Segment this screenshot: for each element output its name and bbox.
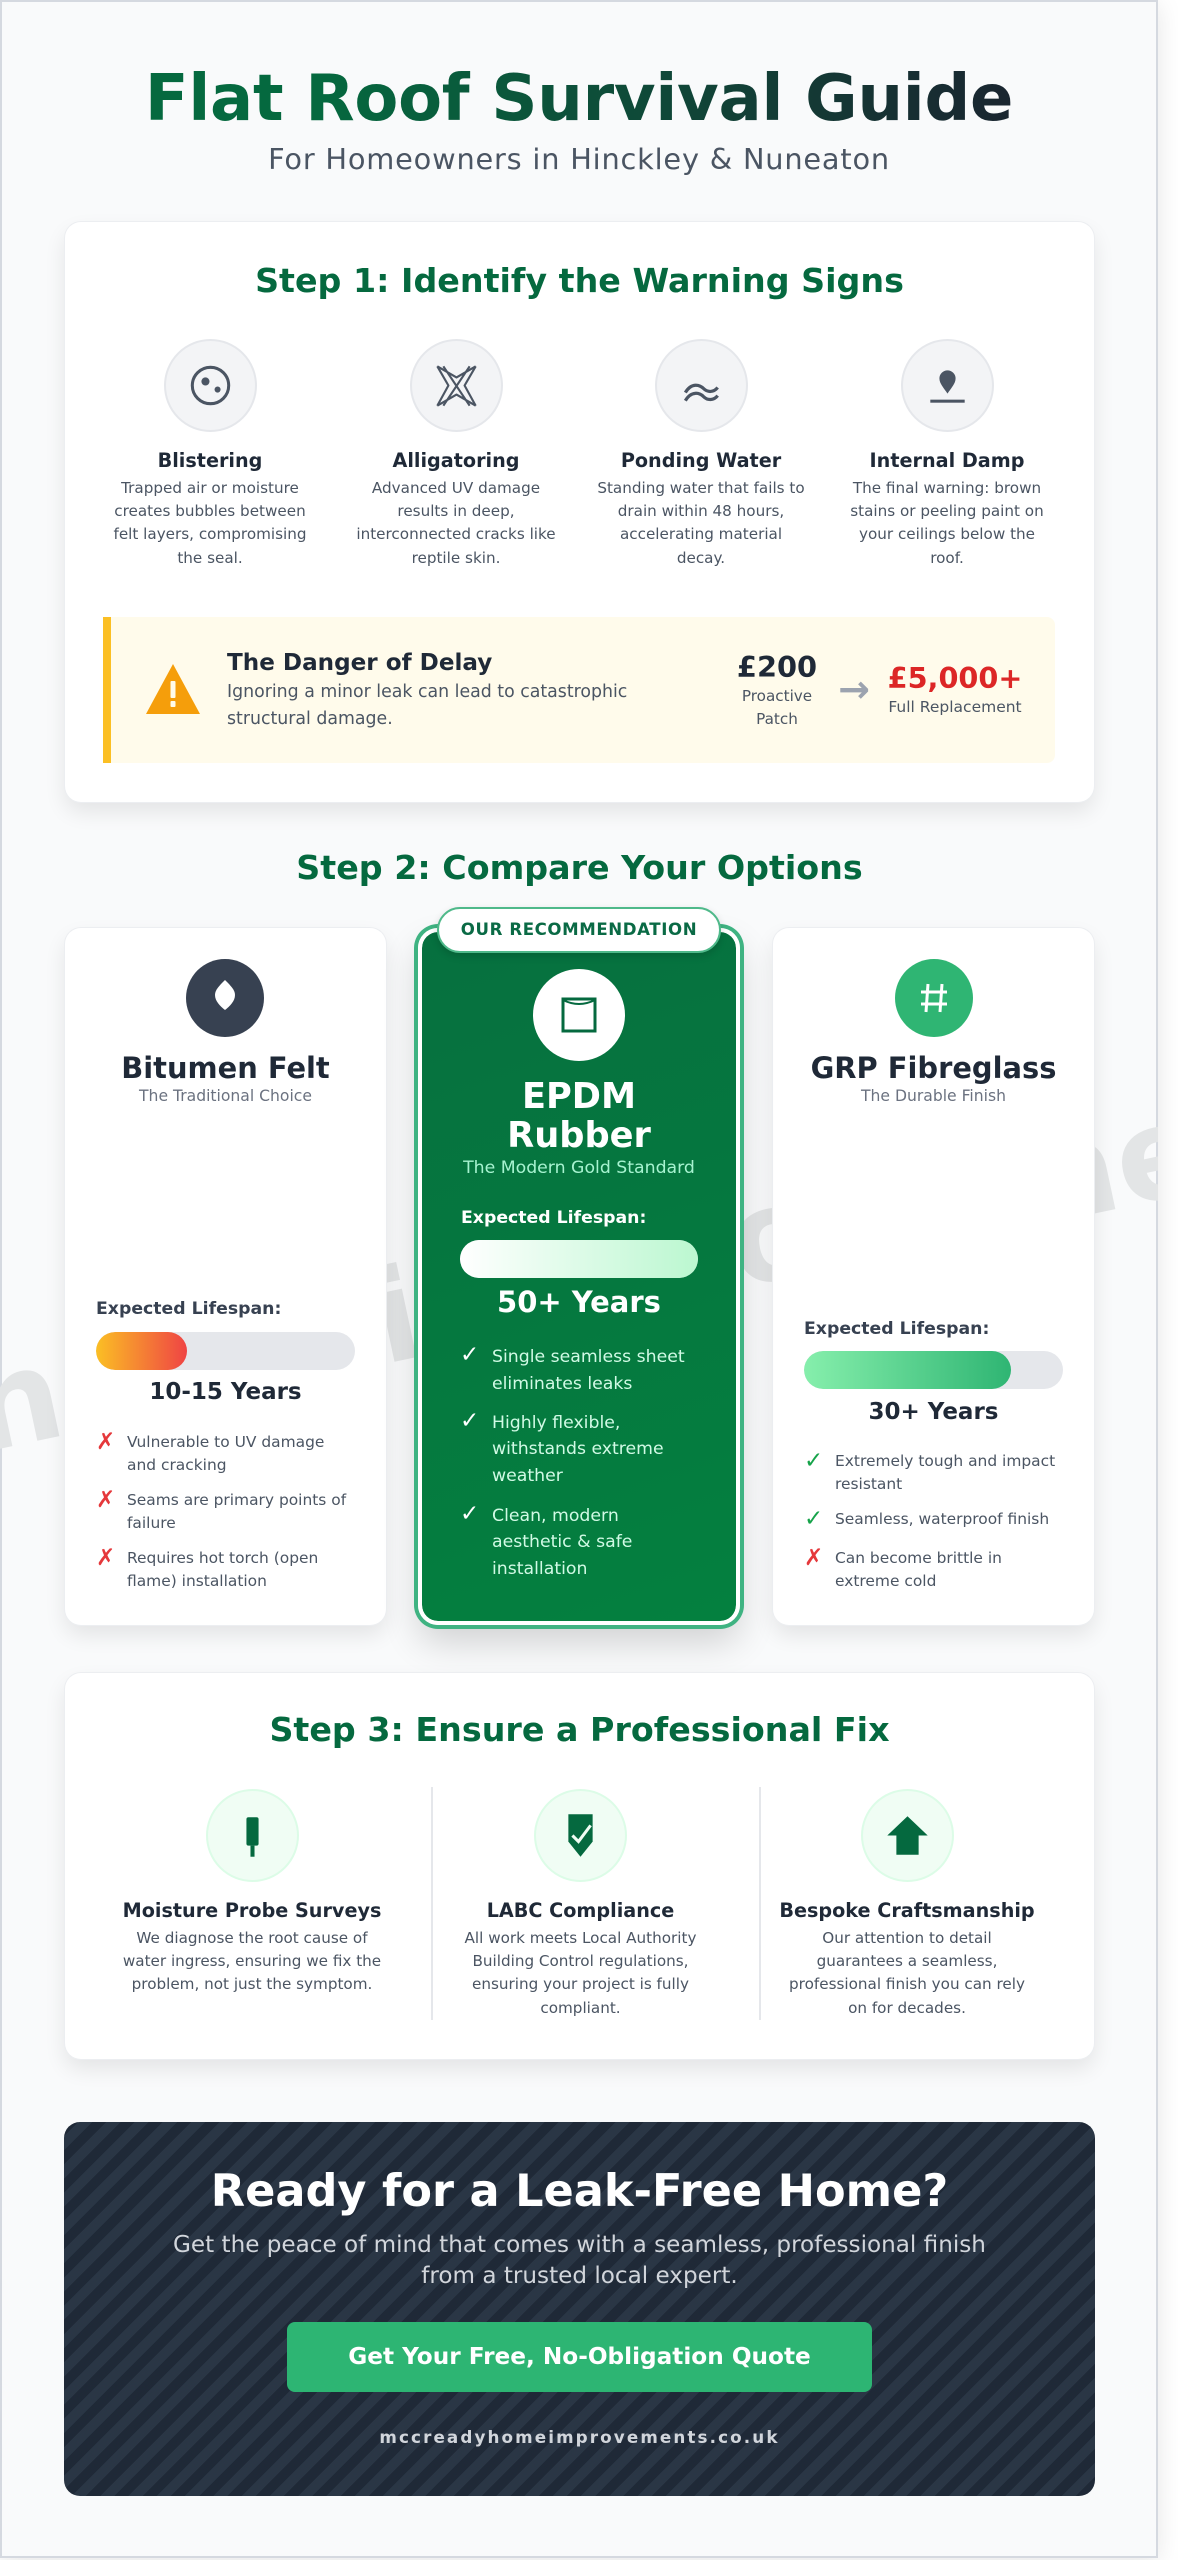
callout heading: The Danger of Delay: [227, 650, 492, 676]
point: flame) installation: [127, 1572, 267, 1590]
point: [804, 1448, 1055, 1493]
description: Trapped air or moisture: [121, 479, 299, 497]
label: Expected Lifespan:: [96, 1299, 281, 1319]
name: Blistering: [158, 449, 262, 472]
point: Can become brittle in: [835, 1548, 1002, 1566]
service: LABC compliance: [464, 1789, 696, 2017]
tagline: The Modern Gold Standard: [463, 1158, 695, 1178]
point: withstands extreme: [492, 1439, 664, 1459]
CTA text: from a trusted local expert.: [421, 2262, 738, 2288]
callout text: Ignoring a minor leak can lead to catastrophic: [227, 682, 627, 702]
name: Moisture Probe Surveys: [123, 1899, 381, 1922]
description: your ceilings below the: [859, 525, 1035, 543]
description: ensuring your project is fully: [472, 1975, 689, 1993]
cost: patch label: Proactive: [742, 686, 812, 704]
name: Bespoke Craftsmanship: [779, 1899, 1035, 1922]
description: guarantees a seamless,: [817, 1952, 997, 1970]
divider right: [759, 1787, 761, 2020]
point: aesthetic & safe: [492, 1532, 632, 1552]
button: Get Your Free, No-Obligation Quote: [348, 2343, 811, 2370]
description: creates bubbles between: [114, 502, 306, 520]
description: interconnected cracks like: [356, 525, 556, 543]
panel: step 3 professional fix: [65, 1673, 1094, 2059]
cost: replacement price: £5,000+: [888, 661, 1022, 695]
description: [123, 1929, 381, 1993]
point: [804, 1506, 1049, 1532]
icon: warning triangle: [146, 664, 200, 714]
description: felt layers, compromising: [113, 525, 307, 543]
panel: call to action: [64, 2122, 1095, 2496]
description: stains or peeling paint on: [850, 502, 1044, 520]
description: results in deep,: [397, 502, 515, 520]
point: ✗: [804, 1544, 823, 1570]
callout text: structural damage.: [227, 708, 393, 728]
lifespan bar: [460, 1240, 698, 1278]
lifespan value: 50+ Years: [497, 1285, 661, 1319]
point: ✓: [460, 1501, 479, 1527]
description: We diagnose the root cause of: [136, 1929, 368, 1947]
point: weather: [492, 1466, 563, 1486]
description: Building Control regulations,: [472, 1952, 689, 1970]
point: [460, 1408, 664, 1486]
service: bespoke craftsmanship: [779, 1789, 1035, 2017]
service: moisture probe: [123, 1789, 381, 1993]
label: Expected Lifespan:: [461, 1208, 646, 1228]
description: [464, 1929, 696, 2017]
tagline: The Traditional Choice: [139, 1087, 312, 1105]
cost: replacement label: Full Replacement: [888, 698, 1022, 716]
CTA text: [173, 2232, 986, 2288]
badge: [437, 907, 721, 953]
description: [789, 1929, 1025, 2017]
cost: patch label: Patch: [756, 710, 798, 728]
name: Ponding Water: [621, 449, 781, 472]
icon: cracks: [410, 339, 503, 432]
point: resistant: [835, 1475, 902, 1493]
divider left: [431, 1787, 433, 2020]
sign: ponding water: [597, 339, 805, 567]
badge: OUR RECOMMENDATION: [461, 920, 697, 939]
name: Alligatoring: [392, 449, 520, 472]
lifespan value: 30+ Years: [868, 1399, 998, 1425]
description: reptile skin.: [412, 549, 500, 567]
panel: EPDM rubber recommended: [418, 928, 740, 1625]
name: Rubber: [507, 1115, 651, 1156]
name: GRP Fibreglass: [811, 1050, 1056, 1084]
description: professional finish you can rely: [789, 1975, 1025, 1993]
point: Highly flexible,: [492, 1413, 620, 1433]
description: All work meets Local Authority: [465, 1929, 696, 1947]
watermark: i: [359, 1239, 433, 1394]
name: Bitumen Felt: [121, 1050, 330, 1084]
icon: drip: [901, 339, 994, 432]
description: on for decades.: [848, 1999, 966, 2017]
point: Extremely tough and impact: [835, 1452, 1055, 1470]
point: Single seamless sheet: [492, 1347, 685, 1367]
description: roof.: [930, 549, 964, 567]
description: accelerating material: [620, 525, 782, 543]
point: Requires hot torch (open: [127, 1548, 318, 1566]
point: failure: [127, 1514, 176, 1532]
point: eliminates leaks: [492, 1374, 632, 1394]
icon: blister: [164, 339, 257, 432]
subtitle: For Homeowners in Hinckley & Nuneaton: [268, 142, 890, 176]
heading: step 3: Step 3: Ensure a Professional Fix: [269, 1710, 890, 1749]
description: [113, 479, 307, 567]
description: Our attention to detail: [822, 1929, 992, 1947]
point: Vulnerable to UV damage: [127, 1432, 324, 1450]
description: Standing water that fails to: [597, 479, 805, 497]
point: [460, 1342, 685, 1394]
lifespan bar: [96, 1332, 355, 1370]
point: Seamless, waterproof finish: [835, 1510, 1049, 1528]
description: [356, 479, 556, 567]
name: Internal Damp: [870, 449, 1024, 472]
panel: step 1 warning signs: [65, 222, 1094, 802]
point: [96, 1544, 318, 1590]
watermark: o: [714, 1154, 831, 1318]
panel: GRP fibreglass: [773, 928, 1094, 1625]
lifespan bar: [804, 1351, 1063, 1389]
name: EPDM: [522, 1076, 636, 1116]
description: decay.: [677, 549, 725, 567]
point: installation: [492, 1559, 587, 1579]
description: The final warning: brown: [853, 479, 1041, 497]
heading: step 1: Step 1: Identify the Warning Signs: [255, 261, 904, 300]
description: Advanced UV damage: [372, 479, 540, 497]
point: ✗: [96, 1544, 115, 1570]
CTA text: Get the peace of mind that comes with a seamless, professional finish: [173, 2232, 986, 2258]
name: [507, 1076, 651, 1156]
point: and cracking: [127, 1456, 227, 1474]
callout text: [227, 682, 627, 728]
point: ✓: [804, 1448, 823, 1474]
point: ✓: [804, 1506, 823, 1532]
description: [597, 479, 805, 567]
tagline: The Durable Finish: [861, 1087, 1006, 1105]
icon: waves: [655, 339, 748, 432]
description: the seal.: [177, 549, 243, 567]
name: LABC Compliance: [487, 1899, 674, 1922]
callout: danger of delay: [103, 617, 1055, 763]
description: drain within 48 hours,: [618, 502, 784, 520]
description: [850, 479, 1044, 567]
cost: patch label: [742, 686, 812, 728]
sign: alligatoring: [356, 339, 556, 567]
point: extreme cold: [835, 1572, 936, 1590]
website: mccreadyhomeimprovements.co.uk: [379, 2427, 780, 2447]
point: ✓: [460, 1408, 479, 1434]
point: [804, 1544, 1002, 1590]
point: Clean, modern: [492, 1506, 619, 1526]
label: Expected Lifespan:: [804, 1319, 989, 1339]
description: problem, not just the symptom.: [132, 1975, 372, 1993]
icon: probe: [206, 1789, 299, 1882]
description: compliant.: [540, 1999, 621, 2017]
sign: internal damp: [850, 339, 1044, 567]
lifespan value: 10-15 Years: [149, 1379, 302, 1405]
icon: shield: [534, 1789, 627, 1882]
arrow: →: [838, 667, 870, 711]
icon: hash: [895, 959, 973, 1037]
description: water ingress, ensuring we fix the: [123, 1952, 381, 1970]
panel: bitumen felt: [65, 928, 386, 1625]
point: [96, 1428, 324, 1474]
watermark: n: [1011, 1092, 1132, 1256]
button: [287, 2322, 872, 2392]
cost: patch price: £200: [737, 650, 817, 684]
point: Seams are primary points of: [127, 1490, 346, 1508]
point: ✓: [460, 1342, 479, 1368]
icon: rubber sheet: [533, 969, 625, 1061]
point: [96, 1486, 346, 1532]
point: ✗: [96, 1428, 115, 1454]
icon: house arrow: [861, 1789, 954, 1882]
heading: step 2: Step 2: Compare Your Options: [296, 848, 863, 887]
point: [460, 1501, 632, 1579]
point: ✗: [96, 1486, 115, 1512]
icon: felt: [186, 959, 264, 1037]
title: Flat Roof Survival Guide: [145, 62, 1013, 136]
sign: blistering: [113, 339, 307, 567]
CTA heading: Ready for a Leak-Free Home?: [211, 2165, 948, 2217]
